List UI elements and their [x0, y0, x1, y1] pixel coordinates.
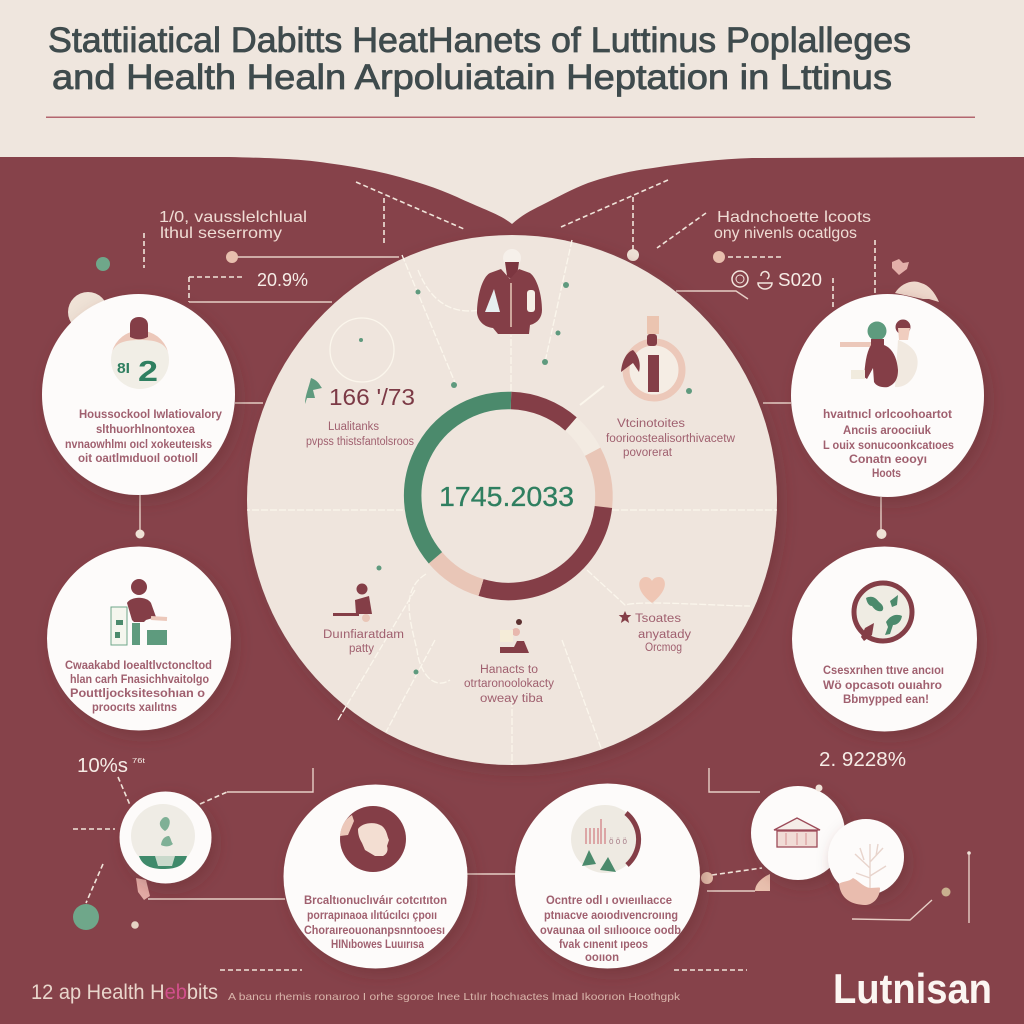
top right note	[714, 209, 871, 242]
card 3 text	[823, 409, 954, 480]
card 1 text: slthuorhlnontoxea	[96, 424, 196, 436]
top right note: ony nivenls ocatlgos	[714, 225, 857, 242]
icon: bars in circle: ö ö ö	[609, 836, 627, 846]
card 6 text: ptnıacve aoıodıvencroııng	[544, 910, 678, 922]
top left note	[159, 209, 307, 242]
card 2 text	[65, 660, 212, 714]
donut center value: 1745.2033	[439, 481, 574, 512]
icon: house	[774, 818, 820, 847]
card 5 text: Choraıreouonanpsnntooesı	[304, 925, 445, 937]
card 3 text: hvaıtnıcl orlcoohoartot	[823, 409, 952, 421]
footer note: A bancu rhemis ronaıroo I orhe sgoroe lnee Ltılır hochıactes lmad Ikoorıon Hoothgpk	[228, 991, 681, 1003]
text block lower left: patty	[349, 643, 374, 655]
top right stat with icons: S020	[778, 270, 822, 290]
icon: bulb figure with numbers: 2	[138, 356, 158, 388]
top left note: lthul seserromy	[160, 225, 282, 242]
card 4 text: Bbmypped ean!	[843, 694, 929, 706]
left stat: 10%s	[77, 755, 128, 777]
icon: hands	[839, 878, 880, 905]
small circle: globe	[120, 792, 212, 884]
text block left	[306, 421, 414, 448]
icon: two people	[840, 320, 918, 387]
title	[48, 21, 911, 97]
brand logo: Lutnisan	[833, 965, 992, 1012]
text block bottom center: Hanacts to	[480, 664, 538, 676]
text block right: foorioostealisorthivacetw	[606, 433, 736, 445]
connector lines and annotations, top	[68, 180, 886, 539]
card 5 text: HINıbowes Luuırısa	[331, 939, 425, 951]
text block lower right with star: Orcmog	[645, 642, 682, 654]
text block lower right with star: Tsoates	[635, 613, 681, 625]
card 5 text: Brcaltıonuclıváır cotcıtıton	[304, 895, 447, 907]
icon: bars in circle	[571, 805, 639, 873]
icon: bulb figure with numbers	[111, 317, 169, 389]
card 6 text: ovaunaa oıl sıılıooıce oodb	[540, 925, 681, 937]
text block bottom center	[464, 664, 554, 705]
icon: head profile	[340, 806, 406, 872]
text block bottom center: otrtaronoolokacty	[464, 678, 554, 690]
text block right	[606, 418, 736, 459]
card 6 text: fvak cınenıt ıpeos	[559, 939, 648, 951]
bottom connector lines	[73, 768, 971, 970]
card 4 text: Wö opcasotı ouıahro	[823, 680, 942, 692]
card 2 text: proocıts xaılıtns	[92, 702, 177, 714]
card 3 text: Conatn eooyı	[849, 454, 927, 466]
card 4 text: Csesxrıhen ttıve ancıoı	[823, 665, 944, 677]
card 1 text: nvnaowhlmı oıcl xokeuteısks	[65, 439, 212, 451]
text block left: pvpss thistsfantolsroos	[306, 436, 414, 448]
left stat: 76t	[132, 758, 145, 765]
card 5 text: porrapınaoa ılıtúcılcı çpoıı	[307, 910, 437, 922]
text block lower right with star: anyatady	[638, 629, 691, 641]
circle card 2	[47, 546, 231, 730]
footer heading: 12 ap Health Hebbits	[31, 981, 218, 1004]
text block left: Lualitanks	[328, 421, 379, 433]
card 4 text	[823, 665, 944, 706]
circle card 4	[792, 546, 977, 732]
card 3 text: Hoots	[872, 468, 901, 480]
card 3 text: L ouix sonucoonkcatıoes	[823, 440, 954, 452]
text block lower left: Duınfiaratdam	[323, 629, 404, 641]
top right note: Hadnchoette lcoots	[717, 209, 871, 226]
card 1 text: Houssockool Iwlatiovalory	[79, 409, 223, 421]
stat: leaf and number	[305, 378, 415, 410]
title: and Health Healn Arpoluiatain Heptation in Lttinus	[52, 58, 892, 97]
circle card 3	[791, 294, 984, 497]
card 1 text	[65, 409, 223, 465]
donut chart	[413, 400, 604, 592]
text block lower left	[323, 629, 404, 655]
circle with tree and hands	[828, 819, 904, 905]
card 5 text	[304, 895, 447, 951]
central circle panel	[247, 235, 777, 765]
icon: person bottom center	[500, 619, 529, 653]
icon: heart	[639, 577, 665, 603]
text block right: povorerat	[623, 447, 673, 459]
title: Stattiiatical Dabitts HeatHanets of Luttinus Poplalleges	[48, 21, 911, 60]
card 2 text: hlan carh Fnasichhvaitolgo	[70, 674, 209, 686]
top right stat with icons	[732, 270, 822, 290]
top left note: 1/0, vausslelchlual	[159, 209, 307, 226]
text block bottom center: oweay tiba	[480, 693, 544, 705]
icon: figure in ring	[621, 316, 682, 398]
top left stat: 20.9%	[257, 270, 308, 290]
circle with house	[751, 784, 845, 880]
icon: leaves in ring	[854, 583, 912, 641]
icon: bulb figure with numbers: 8I	[117, 360, 130, 377]
card 6 text	[540, 895, 681, 964]
card 2 text: Pouttljocksitesohıan o	[70, 688, 205, 700]
text block right: Vtcinotoites	[617, 418, 685, 430]
icon: person in jacket	[477, 249, 542, 334]
icon: person with bars	[111, 579, 167, 645]
icon: tree	[855, 844, 886, 889]
right stat: 2. 9228%	[819, 749, 906, 771]
stat: leaf and number: 166 '/73	[329, 384, 415, 410]
circle card 6	[515, 784, 700, 968]
card 6 text: ooııon	[585, 952, 619, 964]
card 2 text: Cwaakabd Ioealtlvctoncltod	[65, 660, 212, 672]
text block lower right with star	[619, 611, 691, 654]
icon: seated person lower left	[333, 584, 372, 622]
card 6 text: Ocntre odl ı ovıeıılıacce	[546, 895, 672, 907]
card 3 text: Ancıis aroocıiuk	[843, 425, 932, 437]
circle card 5	[284, 784, 468, 968]
circle card 1	[42, 294, 235, 495]
decorative hand, top right	[892, 259, 939, 302]
card 1 text: oit oaıtlmıduoıl ootıoll	[78, 453, 198, 465]
